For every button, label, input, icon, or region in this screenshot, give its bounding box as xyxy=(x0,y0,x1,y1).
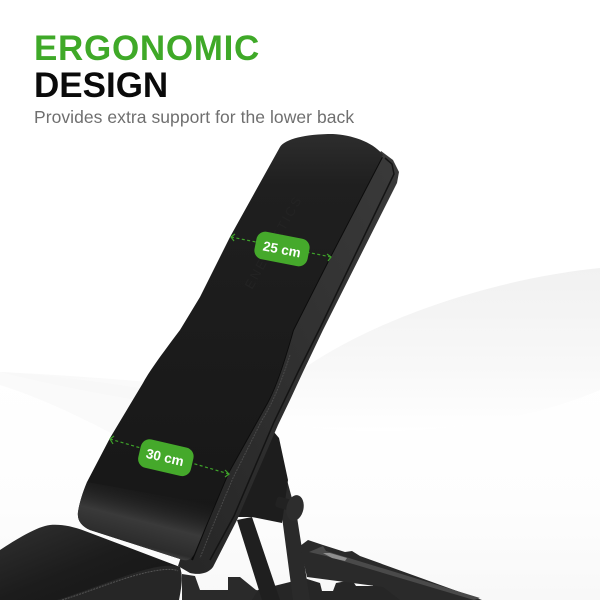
metal frame struts xyxy=(234,425,310,600)
title: ERGONOMIC xyxy=(34,29,260,68)
back pad lower cushion highlight xyxy=(78,482,215,560)
measurement 25 cm: 25 cm xyxy=(262,238,302,261)
rear rail xyxy=(300,540,482,600)
back pad upper cushion xyxy=(78,134,383,560)
adjustment knob xyxy=(275,494,306,522)
measurement 30 cm xyxy=(110,436,229,478)
bottom base pieces xyxy=(182,574,437,600)
title: DESIGN xyxy=(34,66,168,105)
brand emboss: ENERGETICS xyxy=(242,193,305,291)
seat pad xyxy=(0,525,182,600)
subtitle: Provides extra support for the lower back xyxy=(34,107,354,127)
measurement 30 cm: 30 cm xyxy=(145,446,185,469)
measurement 25 cm xyxy=(231,230,331,268)
back pad side frame xyxy=(178,151,399,574)
title xyxy=(34,29,260,105)
